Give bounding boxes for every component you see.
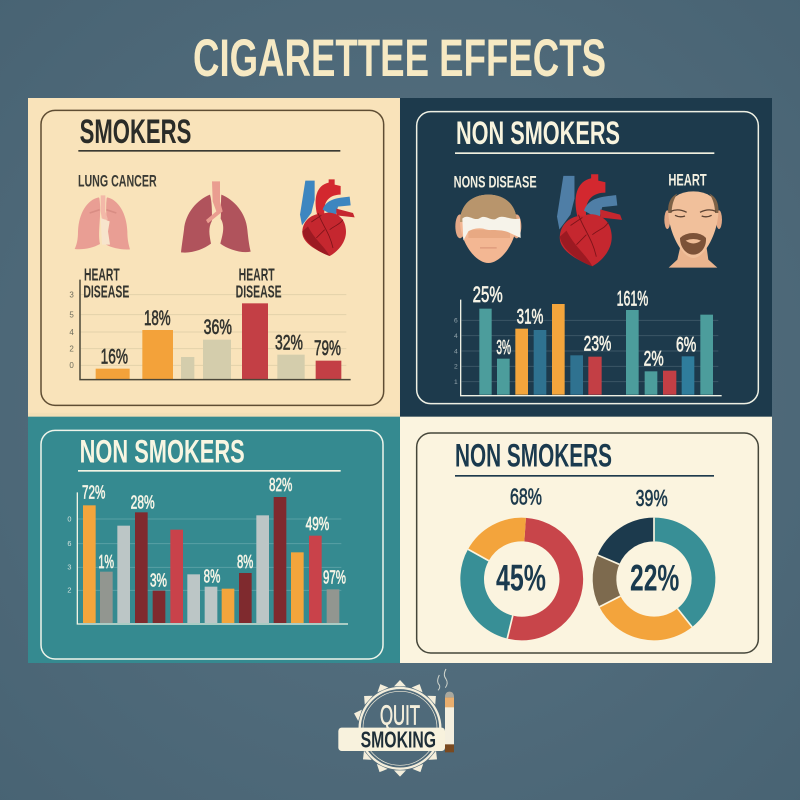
- axis ticks: [67, 514, 71, 595]
- label: lung cancer: LUNG CANCER: [78, 171, 157, 190]
- chart labels: 2%: [644, 346, 664, 370]
- chart labels: HEART: [84, 265, 120, 285]
- chart labels: 8%: [204, 565, 220, 586]
- heading: non smokers: NON SMOKERS: [80, 432, 245, 469]
- chart labels: HEART: [239, 265, 275, 285]
- heading: non smokers: NON SMOKERS: [456, 114, 620, 151]
- label: 39%: 39%: [636, 485, 668, 511]
- chart labels: DISEASE: [236, 282, 282, 302]
- label: nons disease: NONS DISEASE: [454, 172, 537, 191]
- bar chart: dark panel: [454, 282, 722, 396]
- donut chart: 45%: [468, 530, 571, 639]
- axis ticks: 4: [454, 333, 458, 340]
- axis ticks: 2: [69, 345, 74, 354]
- icon: cigarette: [438, 669, 454, 752]
- icon: heart: [557, 174, 622, 266]
- quit text: QUIT: [380, 699, 420, 730]
- label: 68%: 68%: [510, 484, 542, 510]
- bar chart: smokers: [69, 265, 351, 380]
- chart labels: 1%: [98, 551, 114, 572]
- chart labels: [83, 265, 341, 368]
- donut chart: 22%: [598, 518, 703, 628]
- axis ticks: 5: [69, 311, 74, 320]
- panel: non smokers teal: [28, 413, 400, 663]
- chart labels: 16%: [101, 343, 128, 368]
- chart labels: 8%: [237, 551, 253, 572]
- panel: non smokers donuts: [400, 413, 772, 663]
- axis ticks: [69, 291, 74, 370]
- heading: non smokers: NON SMOKERS: [455, 437, 612, 473]
- icon: dark lungs: [181, 181, 251, 253]
- bar chart: teal panel: [67, 474, 348, 624]
- axis ticks: 0: [69, 361, 74, 370]
- axis ticks: [454, 318, 458, 386]
- axis ticks: 2: [67, 586, 71, 595]
- chart labels: 79%: [314, 335, 341, 360]
- icon: man's face: [664, 191, 722, 268]
- chart labels: [473, 282, 696, 370]
- label: heart: HEART: [668, 170, 707, 189]
- chart labels: 28%: [131, 492, 155, 513]
- icon: heart: [300, 179, 355, 256]
- chart labels: 161%: [617, 286, 648, 310]
- chart labels: 72%: [82, 481, 105, 502]
- icon: face with bandage: [455, 195, 521, 263]
- axis ticks: 3: [67, 563, 71, 572]
- chart labels: 23%: [584, 332, 611, 356]
- axis ticks: 6: [67, 539, 71, 548]
- title: CIGARETTEE EFFECTS: [193, 29, 606, 88]
- axis ticks: 4: [454, 348, 458, 355]
- chart labels: DISEASE: [83, 282, 129, 302]
- icon: light lungs: [75, 195, 130, 249]
- axis ticks: 2: [454, 364, 458, 371]
- axis ticks: 3: [69, 291, 74, 300]
- chart labels: 97%: [323, 566, 346, 587]
- banner: [338, 728, 445, 751]
- chart labels: 25%: [473, 282, 503, 307]
- panel: non smokers dark: [400, 98, 772, 413]
- axis ticks: 4: [69, 328, 74, 337]
- value: 22%: 22%: [630, 558, 679, 599]
- smoking text: SMOKING: [361, 727, 436, 753]
- chart labels: 36%: [204, 314, 232, 339]
- value: 45%: 45%: [496, 558, 546, 599]
- panel: smokers: [28, 98, 400, 413]
- chart labels: 18%: [144, 305, 171, 330]
- logo: quit smoking: [338, 669, 454, 777]
- chart labels: 31%: [517, 305, 543, 329]
- chart labels: 49%: [306, 513, 329, 534]
- chart labels: 82%: [269, 474, 292, 495]
- chart labels: 3%: [150, 569, 167, 590]
- chart labels: 6%: [676, 333, 696, 357]
- chart labels: 3%: [496, 336, 511, 359]
- axis ticks: 6: [454, 318, 458, 325]
- sunburst badge: [352, 680, 441, 777]
- chart labels: 32%: [275, 329, 303, 354]
- axis ticks: 1: [454, 379, 458, 386]
- axis ticks: 0: [67, 514, 71, 523]
- heading: smokers: SMOKERS: [80, 113, 191, 151]
- chart labels: [82, 474, 346, 590]
